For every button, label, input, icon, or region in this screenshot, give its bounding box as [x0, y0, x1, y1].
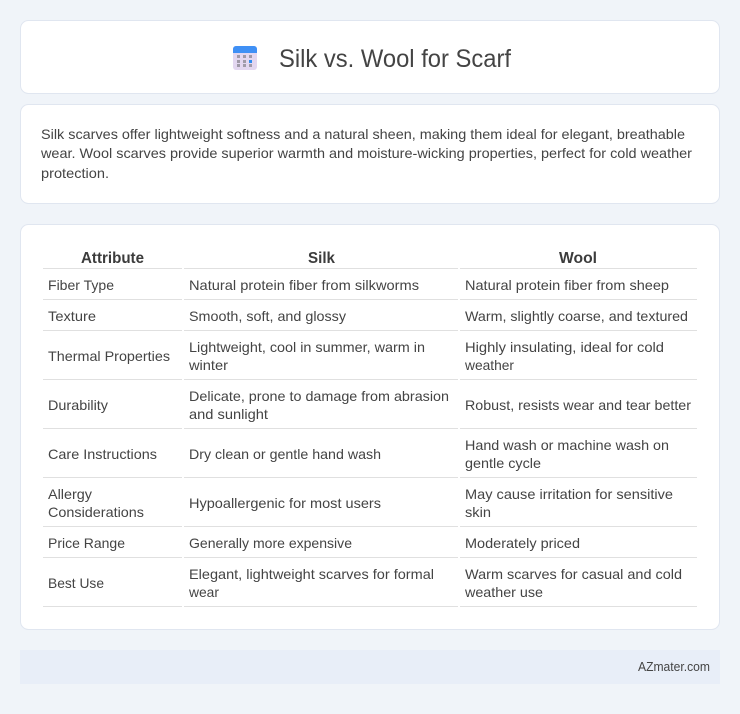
summary text: Silk scarves offer lightweight softness and a natural sheen, making them ideal for elegant, breathable: [41, 126, 685, 142]
row: allergy considerations: May cause irritation for sensitive: [465, 486, 673, 502]
table header: [81, 250, 597, 267]
row: texture: Smooth, soft, and glossy: [189, 308, 346, 324]
row: best use: Warm scarves for casual and cold: [465, 566, 682, 582]
row: price range: Generally more expensive: [189, 535, 352, 551]
row: texture: Warm, slightly coarse, and textured: [465, 308, 688, 324]
row: price range: Price Range: [48, 535, 125, 551]
icon: calendar: [233, 46, 257, 70]
row: fiber type: Natural protein fiber from silkworms: [189, 277, 419, 293]
row: thermal properties: [48, 339, 664, 373]
table header: Attribute: [81, 250, 144, 267]
panel: comparison table: [20, 224, 720, 630]
row: durability: [48, 388, 691, 422]
row: durability: Delicate, prone to damage from abrasion: [189, 388, 449, 404]
row: fiber type: [48, 277, 669, 293]
row: thermal properties: Highly insulating, ideal for cold: [465, 339, 664, 355]
row: fiber type: Fiber Type: [48, 277, 114, 293]
row: texture: [48, 308, 688, 324]
row: best use: wear: [188, 584, 219, 600]
row: price range: Moderately priced: [465, 535, 580, 551]
row: allergy considerations: Hypoallergenic for most users: [189, 495, 381, 511]
row: best use: weather use: [464, 584, 543, 600]
row: allergy considerations: skin: [465, 504, 491, 520]
row: allergy considerations: [48, 486, 673, 520]
row: price range: [48, 535, 580, 551]
row: texture: Texture: [48, 308, 96, 324]
row: durability: and sunlight: [189, 406, 268, 422]
row: thermal properties: weather: [464, 357, 514, 373]
row: thermal properties: winter: [188, 357, 228, 373]
summary text: protection.: [41, 165, 109, 181]
panel: summary: [20, 104, 720, 204]
table header: Silk: [308, 250, 335, 267]
footer: [20, 650, 720, 684]
row: thermal properties: Lightweight, cool in summer, warm in: [189, 339, 425, 355]
row: durability: Robust, resists wear and tear better: [465, 397, 691, 413]
row: care instructions: gentle cycle: [465, 455, 541, 471]
row: care instructions: Hand wash or machine wash on: [465, 437, 669, 453]
table header: Wool: [559, 250, 597, 267]
title: Silk vs. Wool for Scarf: [279, 45, 511, 73]
row: best use: Elegant, lightweight scarves for formal: [189, 566, 434, 582]
row: best use: Best Use: [48, 575, 104, 591]
footer credit: AZmater.com: [638, 659, 710, 674]
summary text: [40, 126, 692, 181]
row: allergy considerations: Considerations: [48, 504, 144, 520]
row: durability: Durability: [48, 397, 108, 413]
row: fiber type: Natural protein fiber from sheep: [465, 277, 669, 293]
row: thermal properties: Thermal Properties: [48, 348, 170, 364]
row: allergy considerations: Allergy: [48, 486, 92, 502]
row: best use: [48, 566, 682, 600]
row: care instructions: Care Instructions: [48, 446, 157, 462]
panel: title header: [20, 20, 720, 94]
row: care instructions: Dry clean or gentle hand wash: [189, 446, 381, 462]
summary text: wear. Wool scarves provide superior warmth and moisture-wicking properties, perfect for cold weather: [40, 145, 692, 161]
row: care instructions: [48, 437, 669, 471]
